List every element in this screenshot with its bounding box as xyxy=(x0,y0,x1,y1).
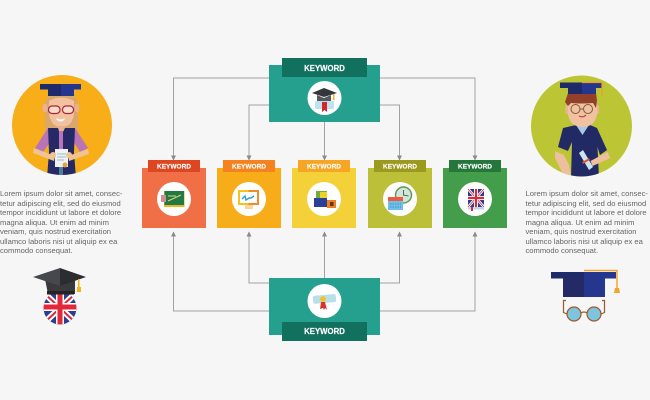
card: orange-red: KEYWORD xyxy=(157,164,191,170)
panel: bottom keyword xyxy=(269,278,380,341)
illustration: man graduate in green circle xyxy=(531,76,632,178)
left lorem ipsum text block: commodo consequat. xyxy=(0,246,73,255)
panel: top keyword xyxy=(269,58,380,122)
right lorem ipsum text block: tetur adipiscing elit, sed do eiusmod xyxy=(526,199,646,208)
icon: chalkboard xyxy=(161,191,184,207)
card: orange xyxy=(217,160,281,228)
left lorem ipsum text block: tetur adipiscing elit, sed do eiusmod xyxy=(0,199,121,208)
icon: black graduation cap over british flag circle xyxy=(33,268,86,325)
right lorem ipsum text block xyxy=(526,189,648,255)
card: green: KEYWORD xyxy=(458,164,492,170)
top keyword label: KEYWORD xyxy=(304,64,345,73)
left lorem ipsum text block: veniam, quis nostrud exercitation xyxy=(0,227,111,236)
icon: blue graduation cap with glasses xyxy=(551,270,620,321)
card: yellow xyxy=(292,160,356,228)
card: yellow: KEYWORD xyxy=(307,164,341,170)
right lorem ipsum text block: veniam, quis nostrud exercitation xyxy=(526,227,637,236)
left lorem ipsum text block: ullamco laboris nisi ut aliquip ex ea xyxy=(0,237,118,246)
icon: whiteboard xyxy=(238,190,259,209)
illustration: woman graduate in orange circle xyxy=(12,75,112,178)
icon: graduation cap with diploma xyxy=(312,88,337,112)
right lorem ipsum text block: commodo consequat. xyxy=(526,246,598,255)
card: green xyxy=(443,160,507,228)
card: olive xyxy=(368,160,432,228)
bottom keyword label: KEYWORD xyxy=(304,327,345,336)
right lorem ipsum text block: Lorem ipsum dolor sit amet, consec- xyxy=(526,189,648,198)
card: orange: KEYWORD xyxy=(232,164,266,170)
connector arrows: bottom panel to cards xyxy=(174,232,475,311)
connector arrows: top panel to cards xyxy=(174,78,475,160)
card: olive: KEYWORD xyxy=(383,164,417,170)
icon: clock and calendar xyxy=(388,187,412,210)
right lorem ipsum text block: ullamco laboris nisi ut aliquip ex ea xyxy=(526,237,644,246)
card: orange-red xyxy=(142,160,206,228)
left lorem ipsum text block: tempor incididunt ut labore et dolore xyxy=(0,208,121,217)
left lorem ipsum text block: magna aliqua. Ut enim ad minim xyxy=(0,218,109,227)
left lorem ipsum text block xyxy=(0,189,123,255)
icon: alphabet blocks xyxy=(314,191,336,208)
right lorem ipsum text block: magna aliqua. Ut enim ad minim xyxy=(526,218,634,227)
icon: diploma scroll xyxy=(313,294,336,310)
right lorem ipsum text block: tempor incididunt ut labore et dolore xyxy=(526,208,647,217)
left lorem ipsum text block: Lorem ipsum dolor sit amet, consec- xyxy=(0,189,123,198)
icon: british flag book xyxy=(468,189,484,211)
